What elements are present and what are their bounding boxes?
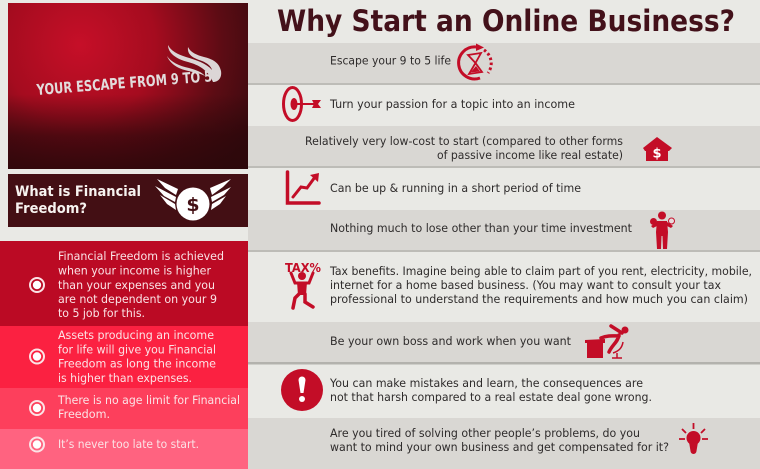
row text: not that harsh compared to a real estate deal gone wrong. bbox=[330, 390, 652, 404]
row: be your own boss bbox=[248, 322, 760, 364]
hero slogan: YOUR ESCAPE FROM 9 TO 5 bbox=[35, 67, 213, 99]
icon: boss with feet on desk bbox=[585, 326, 628, 358]
assets text: Freedom as long the income bbox=[58, 356, 216, 370]
bullet icon bbox=[30, 350, 44, 364]
panel: financial freedom definition bbox=[0, 241, 248, 326]
row: low cost bbox=[248, 126, 760, 168]
icon: man lifting tax: TAX% bbox=[285, 260, 321, 275]
assets text: for life will give you Financial bbox=[58, 342, 216, 356]
row: nothing to lose bbox=[248, 210, 760, 252]
definition text: than your expenses and you bbox=[58, 278, 215, 292]
icon: house with dollar: $ bbox=[652, 146, 662, 162]
heading text: What is Financial bbox=[15, 184, 141, 200]
row text: of passive income like real estate) bbox=[437, 148, 623, 162]
row text: Escape your 9 to 5 life bbox=[330, 54, 451, 68]
definition text: Financial Freedom is achieved bbox=[58, 249, 224, 263]
row: own business bbox=[248, 418, 760, 469]
row text: Can be up & running in a short period of time bbox=[330, 181, 581, 195]
icon: exclamation mark bbox=[281, 369, 323, 411]
assets text: Assets producing an income bbox=[58, 328, 214, 342]
row text: want to mind your own business and get compensated for it? bbox=[330, 440, 669, 454]
assets text: is higher than expenses. bbox=[58, 371, 192, 385]
never too late text: It’s never too late to start. bbox=[58, 437, 199, 451]
heading text: Freedom? bbox=[15, 201, 87, 217]
icon: man lifting tax bbox=[285, 260, 321, 308]
icon: man weighing time and money bbox=[650, 212, 674, 249]
age limit text: There is no age limit for Financial bbox=[57, 393, 240, 407]
row: tax benefits bbox=[248, 252, 760, 322]
icon: house with dollar bbox=[643, 137, 672, 162]
icon: swoosh logo bbox=[167, 45, 221, 82]
panel: hero image bbox=[8, 3, 248, 169]
icon: winged dollar: $ bbox=[186, 194, 200, 216]
row: mistakes bbox=[248, 365, 760, 418]
icon: hourglass clock bbox=[459, 44, 491, 79]
panel: never too late bbox=[0, 429, 248, 469]
definition text: are not dependent on your 9 bbox=[58, 292, 217, 306]
row: escape 9 to 5 bbox=[248, 43, 760, 85]
icon: light bulb bbox=[679, 423, 708, 454]
panel: assets bbox=[0, 326, 248, 388]
panel: what is financial freedom heading bbox=[8, 174, 248, 227]
row text: Turn your passion for a topic into an income bbox=[329, 97, 575, 111]
row text: You can make mistakes and learn, the consequences are bbox=[329, 376, 643, 390]
bullet icon bbox=[30, 278, 44, 292]
icon: target and arrow bbox=[284, 88, 321, 120]
bullet icon bbox=[30, 438, 44, 452]
row: short time bbox=[248, 168, 760, 209]
row text: professional to understand the requirements and how much you can claim) bbox=[330, 292, 748, 306]
age limit text: Freedom. bbox=[58, 407, 110, 421]
row text: Nothing much to lose other than your time investment bbox=[330, 221, 632, 235]
definition text: when your income is higher bbox=[58, 264, 211, 278]
row text: Relatively very low-cost to start (compared to other forms bbox=[305, 134, 623, 148]
row text: Are you tired of solving other people’s problems, do you bbox=[330, 426, 640, 440]
row text: Be your own boss and work when you want bbox=[330, 334, 571, 348]
definition text: to 5 job for this. bbox=[58, 306, 145, 320]
icon: rising chart bbox=[288, 172, 319, 203]
bullet icon bbox=[30, 401, 44, 415]
row: passion bbox=[248, 85, 760, 126]
row text: internet for a home based business. (You may want to consult your tax bbox=[330, 278, 721, 292]
panel: no age limit bbox=[0, 388, 248, 429]
icon: winged dollar bbox=[155, 179, 231, 220]
